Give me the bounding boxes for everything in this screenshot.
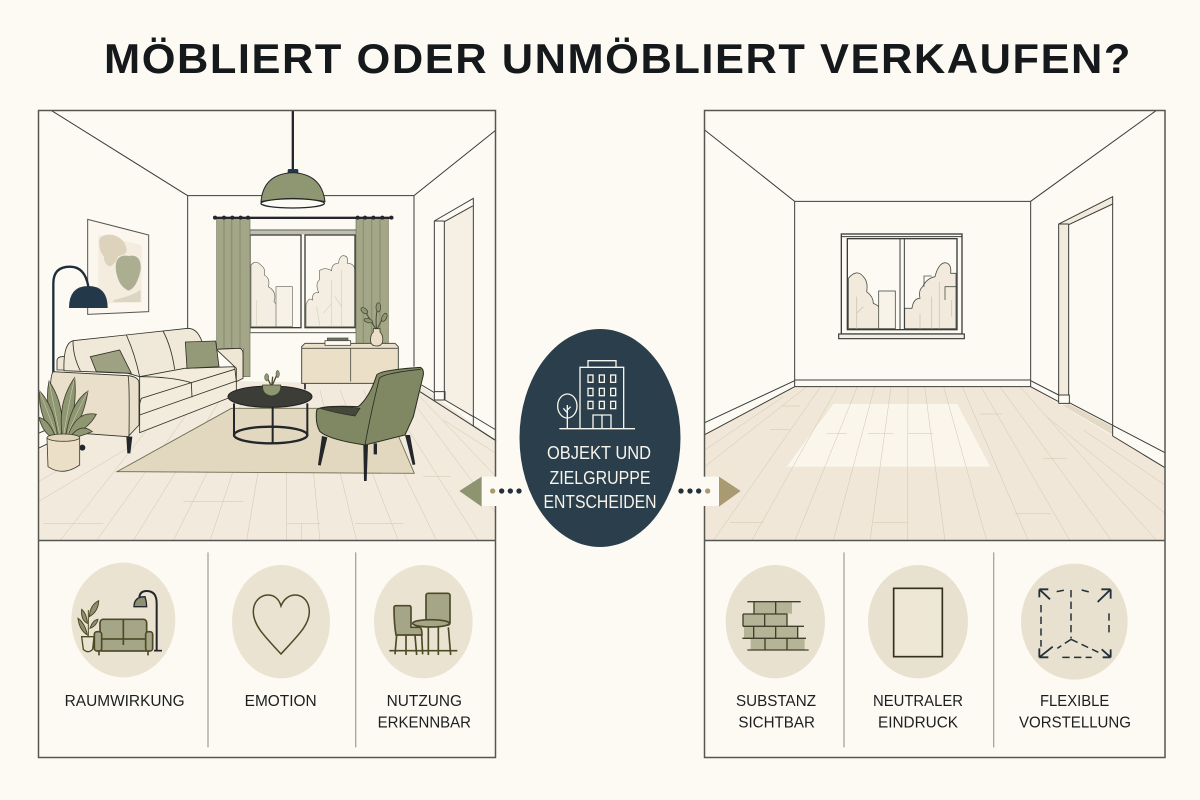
label: Substanz sichtbar: SUBSTANZ bbox=[736, 693, 816, 710]
door bbox=[434, 198, 496, 441]
label: Nutzung erkennbar: ERKENNBAR bbox=[378, 715, 471, 732]
arrow: right bbox=[678, 477, 741, 507]
rug bbox=[117, 408, 414, 473]
callout: decision oval bbox=[520, 329, 680, 547]
title: MÖBLIERT ODER UNMÖBLIERT VERKAUFEN? bbox=[104, 35, 1132, 82]
floor with sunlight bbox=[705, 387, 1165, 541]
sideboard bbox=[302, 338, 398, 389]
label: Flexible Vorstellung: FLEXIBLE bbox=[1040, 693, 1109, 710]
curtains and rod bbox=[213, 216, 393, 377]
vase with branches bbox=[360, 303, 388, 346]
label: decision text: ENTSCHEIDEN bbox=[544, 492, 656, 512]
icon: sofa and lamp bbox=[71, 563, 175, 677]
icon: brick wall bbox=[726, 565, 825, 678]
window with trees bbox=[250, 230, 356, 333]
walls bbox=[705, 111, 1165, 468]
pendant lamp bbox=[261, 111, 325, 208]
feature row: unfurnished bbox=[726, 552, 1131, 747]
feature row: furnished bbox=[65, 552, 473, 747]
label: Neutraler Eindruck: NEUTRALER bbox=[873, 693, 963, 710]
armchair bbox=[316, 367, 423, 481]
wall art bbox=[88, 219, 149, 314]
panel frame bbox=[704, 110, 1165, 758]
icon: chairs and table bbox=[374, 565, 473, 678]
icon: dashed cube with arrows bbox=[1021, 564, 1128, 680]
label: Emotion: EMOTION bbox=[245, 693, 317, 710]
illustration: empty room bbox=[705, 111, 1165, 541]
panel: furnished bbox=[38, 110, 496, 758]
arrow: left bbox=[459, 477, 522, 507]
sofa bbox=[50, 328, 243, 453]
door bbox=[1059, 197, 1113, 436]
panel: unfurnished bbox=[704, 110, 1165, 758]
icon: heart bbox=[232, 565, 330, 678]
label: decision text: ZIELGRUPPE bbox=[550, 468, 650, 488]
label: Flexible Vorstellung: VORSTELLUNG bbox=[1019, 715, 1131, 732]
label: Raumwirkung: RAUMWIRKUNG bbox=[65, 693, 185, 710]
panel frame bbox=[38, 110, 496, 758]
coffee table bbox=[228, 370, 312, 443]
icon: building and tree bbox=[558, 361, 635, 429]
illustration: furnished room bbox=[38, 111, 496, 541]
label: Neutraler Eindruck: EINDRUCK bbox=[878, 715, 958, 732]
room shell and floor bbox=[38, 111, 496, 541]
potted plant bbox=[39, 378, 96, 471]
window with trees bbox=[839, 234, 964, 339]
floor lamp bbox=[53, 267, 108, 387]
icon: blank frame bbox=[868, 565, 968, 678]
label: Substanz sichtbar: SICHTBAR bbox=[738, 715, 815, 732]
label: decision text: OBJEKT UND bbox=[547, 443, 651, 463]
label: Nutzung erkennbar: NUTZUNG bbox=[387, 693, 462, 710]
